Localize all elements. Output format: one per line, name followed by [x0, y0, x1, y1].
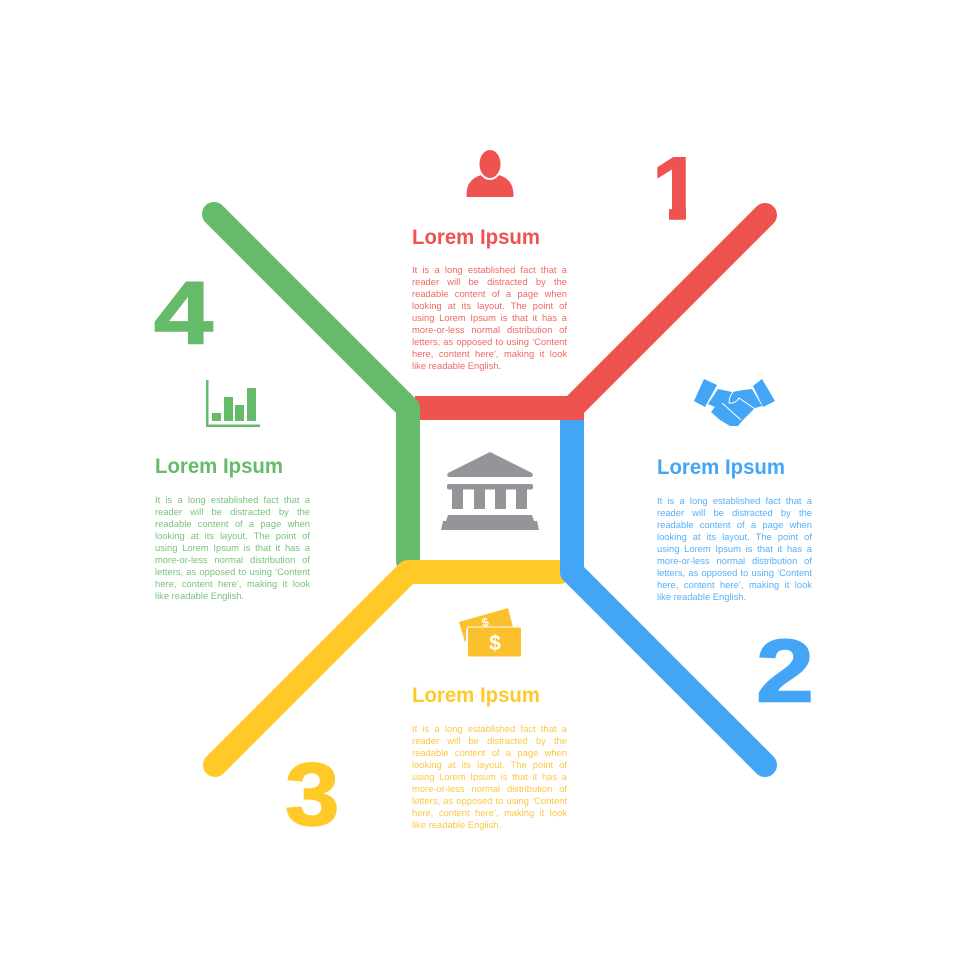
- panel: step 3 yellow: [285, 608, 568, 844]
- text block: more-or-less normal distribution of: [412, 783, 567, 794]
- text block: It is a long established fact that a: [155, 494, 310, 505]
- text block: letters, as opposed to using ‘Content: [657, 567, 812, 578]
- diagram frame: four coloured arms: [214, 203, 777, 765]
- text block: reader will be distracted by the: [657, 507, 812, 518]
- icon: money: $: [480, 615, 491, 630]
- text block: reader will be distracted by the: [412, 735, 567, 746]
- icon: handshake: [694, 379, 775, 426]
- text block: like readable English.: [155, 590, 244, 601]
- text block: [412, 723, 568, 833]
- number 3: 3: [285, 744, 340, 844]
- text block: using Lorem Ipsum is that it has a: [155, 542, 310, 553]
- text block: using Lorem Ipsum is that it has a: [657, 543, 812, 554]
- icon: money: $: [489, 632, 501, 655]
- arm: green: [214, 214, 408, 561]
- arm: red: [415, 215, 765, 408]
- heading: Lorem Ipsum: [412, 226, 540, 249]
- text block: like readable English.: [657, 591, 746, 602]
- text block: looking at its layout. The point of: [155, 530, 310, 541]
- text block: more-or-less normal distribution of: [657, 555, 812, 566]
- text block: like readable English.: [412, 819, 501, 830]
- text block: like readable English.: [412, 360, 501, 371]
- text block: reader will be distracted by the: [412, 276, 567, 287]
- text block: looking at its layout. The point of: [412, 300, 567, 311]
- text block: readable content of a page when: [412, 747, 567, 758]
- number 4: 4: [154, 262, 214, 362]
- text block: looking at its layout. The point of: [412, 759, 567, 770]
- text block: here, content here’, making it look: [657, 579, 812, 590]
- text block: looking at its layout. The point of: [657, 531, 812, 542]
- heading: Lorem Ipsum: [412, 684, 540, 707]
- text block: [155, 494, 311, 604]
- icon: money: [459, 608, 522, 657]
- heading: Lorem Ipsum: [657, 456, 785, 479]
- heading: Lorem Ipsum: [155, 455, 283, 478]
- text block: It is a long established fact that a: [412, 723, 567, 734]
- text block: [657, 495, 813, 605]
- icon: bank: [441, 452, 539, 530]
- text block: more-or-less normal distribution of: [412, 324, 567, 335]
- icon: bar chart: [206, 380, 260, 427]
- text block: letters, as opposed to using ‘Content: [412, 336, 567, 347]
- text block: using Lorem Ipsum is that it has a: [412, 771, 567, 782]
- text block: here, content here’, making it look: [155, 578, 310, 589]
- text block: using Lorem Ipsum is that it has a: [412, 312, 567, 323]
- text block: readable content of a page when: [412, 288, 567, 299]
- arm: yellow: [215, 572, 560, 765]
- panel: step 1 red: [412, 138, 710, 374]
- panel: step 2 blue: [657, 379, 814, 720]
- arm: blue: [572, 420, 765, 765]
- icon: person: [466, 149, 514, 197]
- text block: here, content here’, making it look: [412, 348, 567, 359]
- text block: readable content of a page when: [657, 519, 812, 530]
- panel: step 4 green: [154, 262, 311, 604]
- text block: more-or-less normal distribution of: [155, 554, 310, 565]
- text block: letters, as opposed to using ‘Content: [412, 795, 567, 806]
- text block: [412, 264, 568, 374]
- text block: letters, as opposed to using ‘Content: [155, 566, 310, 577]
- number 2: 2: [756, 620, 814, 720]
- number 1: 1: [652, 138, 702, 238]
- text block: readable content of a page when: [155, 518, 310, 529]
- text block: reader will be distracted by the: [155, 506, 310, 517]
- text block: It is a long established fact that a: [412, 264, 567, 275]
- text block: here, content here’, making it look: [412, 807, 567, 818]
- text block: It is a long established fact that a: [657, 495, 812, 506]
